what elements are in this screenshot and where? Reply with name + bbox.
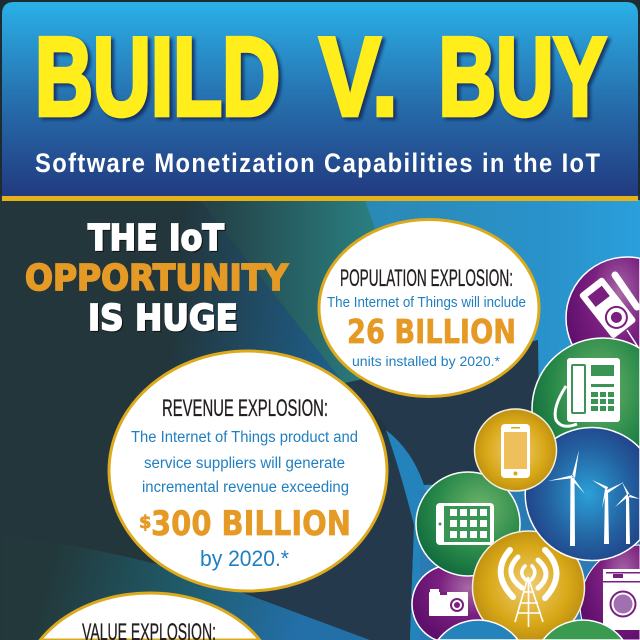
bubble: revenue explosion: 300 BILLION — [151, 504, 351, 544]
subtitle: Software Monetization Capabilities in the IoT — [35, 149, 600, 178]
icon circle: purple medical device — [566, 257, 640, 379]
bubble: revenue explosion: by 2020.* — [200, 546, 289, 571]
bubble: population explosion: POPULATION EXPLOSION: — [340, 265, 513, 292]
title: V. — [320, 15, 398, 139]
bubble: revenue explosion: $ — [139, 512, 152, 533]
icon circle: bottom blue — [438, 620, 518, 640]
heading: the IoT opportunity is huge: THE IoT — [89, 219, 225, 260]
icon circle: purple washer — [580, 545, 640, 640]
bubble: revenue explosion: The Internet of Things product and — [131, 429, 358, 446]
icon circle: gold radio tower — [472, 531, 585, 640]
bubble: population explosion: The Internet of Things will include — [327, 295, 526, 311]
bubble: population explosion: units installed by 2020.* — [352, 353, 501, 369]
icon circle: blue wind turbines — [525, 428, 640, 561]
background — [0, 195, 640, 640]
heading: the IoT opportunity is huge: OPPORTUNITY — [25, 258, 289, 299]
header banner — [2, 2, 638, 201]
icon circle: purple camera — [412, 565, 490, 640]
icon circle: gold smartphone — [474, 409, 556, 491]
heading: the IoT opportunity is huge: THE IoT — [88, 218, 224, 259]
title: BUILD — [35, 15, 280, 139]
icon circle: bottom green — [543, 620, 623, 640]
bubble: revenue explosion — [109, 351, 387, 591]
bubble: revenue explosion: service suppliers will generate — [144, 455, 345, 472]
bubble: population explosion — [319, 220, 539, 396]
icon circle: green telephone — [532, 338, 640, 480]
bubble: value explosion — [40, 593, 260, 640]
icon circle: green tablet — [416, 472, 520, 576]
heading: the IoT opportunity is huge: IS HUGE — [89, 299, 239, 340]
bubble: revenue explosion: incremental revenue exceeding — [142, 479, 349, 496]
bubble: revenue explosion: REVENUE EXPLOSION: — [162, 395, 328, 422]
title — [35, 15, 606, 139]
heading: the IoT opportunity is huge — [25, 218, 289, 340]
bubble: population explosion: 26 BILLION — [347, 312, 516, 351]
heading: the IoT opportunity is huge: IS HUGE — [88, 298, 238, 339]
